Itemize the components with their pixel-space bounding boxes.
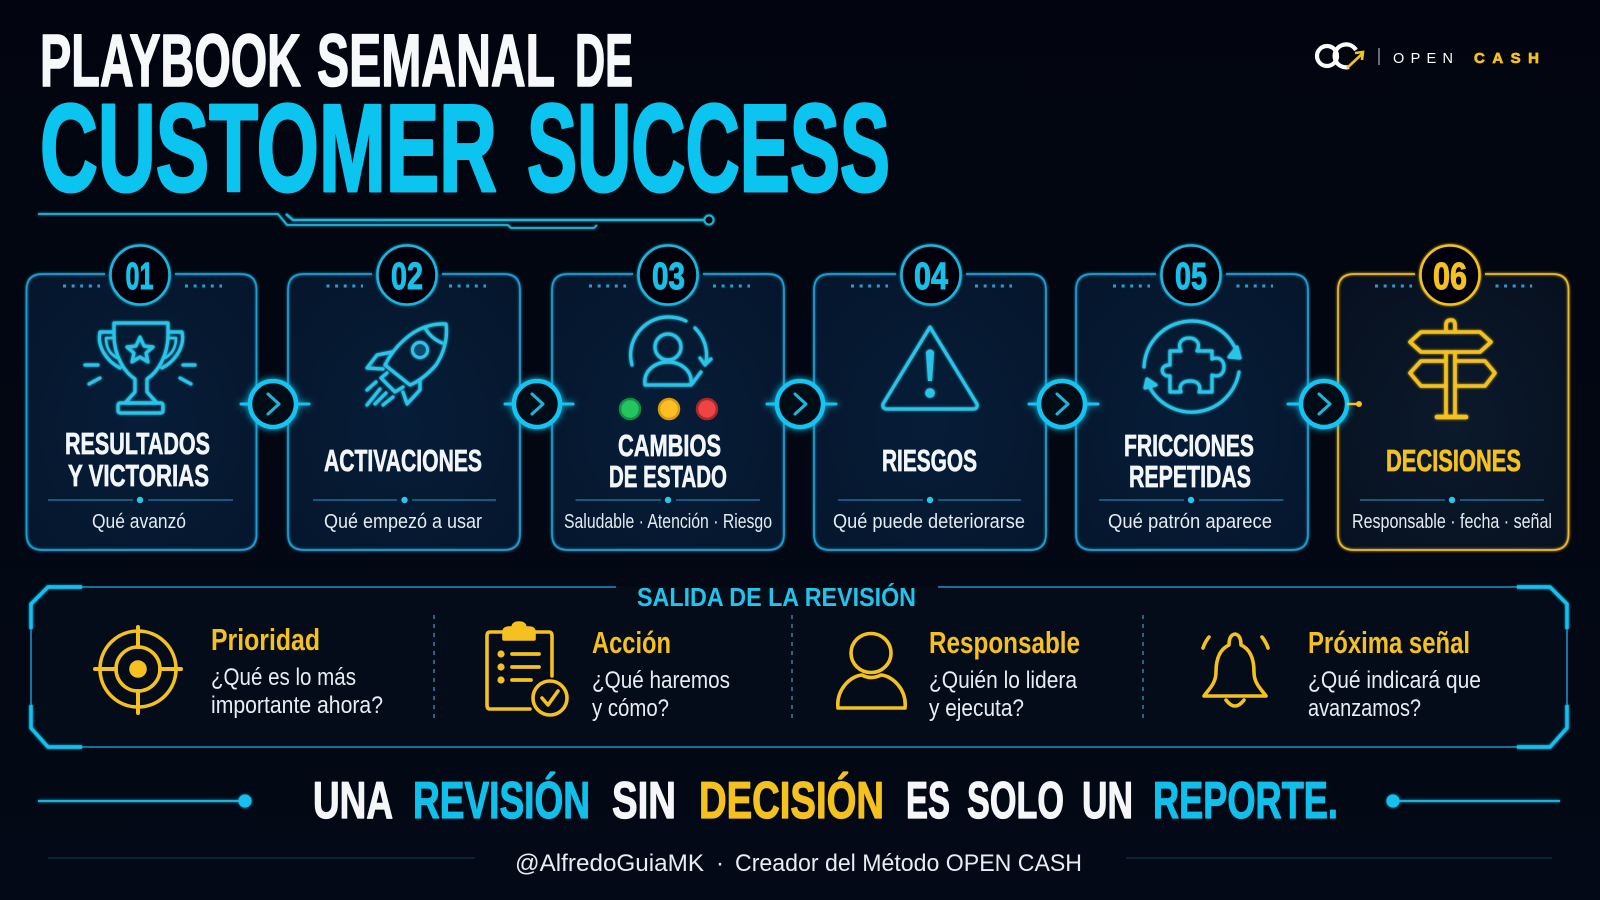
footer credit: · (716, 850, 724, 877)
panel heading: SALIDA DE LA REVISIÓN (637, 582, 916, 612)
item: prioridad: ¿Qué es lo más (211, 664, 356, 691)
closing statement: REVISIÓN (413, 772, 590, 830)
card subtitle: Qué empezó a usar (324, 511, 482, 533)
title: DE (575, 19, 633, 102)
arrow 4 to 5 (1029, 381, 1098, 427)
item: accion (487, 623, 730, 722)
card title: Y VICTORIAS (68, 458, 209, 493)
closing statement: UN (1082, 772, 1133, 830)
item: prioridad: importante ahora? (211, 692, 383, 719)
title circuit rule (38, 214, 714, 228)
arrow 5 to 6 (1288, 381, 1362, 427)
closing statement: SIN (612, 772, 676, 830)
icon: target (95, 627, 181, 713)
card title: REPETIDAS (1129, 459, 1251, 494)
footer credit (515, 850, 1082, 877)
item: accion: ¿Qué haremos (592, 667, 730, 694)
card subtitle: Qué puede deteriorarse (833, 511, 1025, 533)
icon: trophy (85, 323, 195, 413)
item: responsable: y ejecuta? (929, 695, 1024, 722)
number badge 01 (110, 246, 170, 304)
panel: salida de la revision (31, 582, 1567, 747)
item: responsable (838, 625, 1080, 722)
number badge 02: 02 (391, 256, 423, 298)
card title: RESULTADOS (65, 426, 210, 461)
footer credit: @AlfredoGuiaMK (515, 850, 704, 877)
number badge 05 (1162, 246, 1220, 304)
panel: card 3 cambios de estado (552, 246, 784, 550)
closing statement: SOLO (967, 772, 1064, 830)
item: accion: Acción (592, 625, 671, 660)
icon: person (838, 634, 905, 708)
title: SEMANAL (317, 19, 555, 102)
title: PLAYBOOK (40, 19, 301, 102)
traffic lights (620, 399, 717, 419)
icon: warning triangle (883, 327, 977, 409)
arrow 3 to 4 (767, 381, 836, 427)
closing statement: REPORTE. (1153, 772, 1338, 830)
corner brackets (31, 587, 1567, 747)
panel: card 5 fricciones repetidas (1076, 246, 1308, 550)
number badge 02 (378, 246, 436, 304)
item: prioridad: Prioridad (211, 622, 320, 657)
icon: puzzle with cycle arrows (1144, 321, 1240, 412)
number badge 06: 06 (1433, 256, 1467, 298)
card title: RIESGOS (882, 443, 977, 478)
logo: Open Cash: OPEN (1393, 51, 1453, 67)
closing line right (1386, 794, 1560, 808)
icon: rocket (367, 324, 447, 405)
card title (609, 428, 727, 494)
icon: customer state cycle (631, 317, 711, 385)
card title (1124, 428, 1254, 494)
panel: card 1 resultados y victorias (26, 246, 256, 550)
arrow 2 to 3 (505, 381, 573, 427)
icon: signpost (1410, 320, 1495, 417)
icon: bell (1203, 634, 1268, 706)
item: responsable: Responsable (929, 625, 1080, 660)
title: SUCCESS (527, 80, 890, 218)
card title (65, 426, 210, 493)
card title: DE ESTADO (609, 459, 727, 494)
item: prioridad (95, 622, 383, 719)
card subtitle: Qué patrón aparece (1108, 511, 1272, 533)
title: CUSTOMER (40, 80, 497, 218)
item: proxima senal: avanzamos? (1308, 695, 1421, 722)
card subtitle: Saludable · Atención · Riesgo (564, 511, 772, 533)
card subtitle: Responsable · fecha · señal (1352, 511, 1552, 533)
panel: card 2 activaciones (288, 246, 520, 550)
number badge 05: 05 (1175, 256, 1207, 298)
logo: Open Cash: CASH (1474, 50, 1539, 67)
card title: ACTIVACIONES (324, 443, 482, 478)
item: responsable: ¿Quién lo lidera (929, 667, 1077, 694)
title (40, 19, 890, 218)
panel: card 4 riesgos (814, 246, 1046, 550)
number badge 03 (638, 246, 698, 304)
closing statement: UNA (313, 772, 393, 830)
item: proxima senal (1203, 625, 1481, 722)
number badge 03: 03 (652, 256, 685, 298)
number badge 04: 04 (914, 256, 948, 298)
card title: FRICCIONES (1124, 428, 1254, 463)
panel: card 6 decisiones (1338, 246, 1568, 550)
logo: Open Cash (1317, 44, 1539, 68)
closing line left (38, 794, 252, 808)
item: proxima senal: Próxima señal (1308, 625, 1470, 660)
number badge 06 (1420, 246, 1480, 304)
footer credit: Creador del Método OPEN CASH (735, 850, 1082, 877)
item: accion: y cómo? (592, 695, 669, 722)
number badge 04 (902, 246, 960, 304)
arrow 1 to 2 (241, 381, 309, 427)
item: proxima senal: ¿Qué indicará que (1308, 667, 1481, 694)
card title: CAMBIOS (618, 428, 721, 463)
card subtitle: Qué avanzó (92, 511, 186, 533)
card title: DECISIONES (1386, 443, 1521, 478)
number badge 01: 01 (126, 256, 154, 298)
closing statement: DECISIÓN (699, 772, 884, 830)
closing statement: ES (906, 772, 950, 830)
closing statement (313, 772, 1338, 830)
icon: clipboard with check (487, 623, 567, 715)
